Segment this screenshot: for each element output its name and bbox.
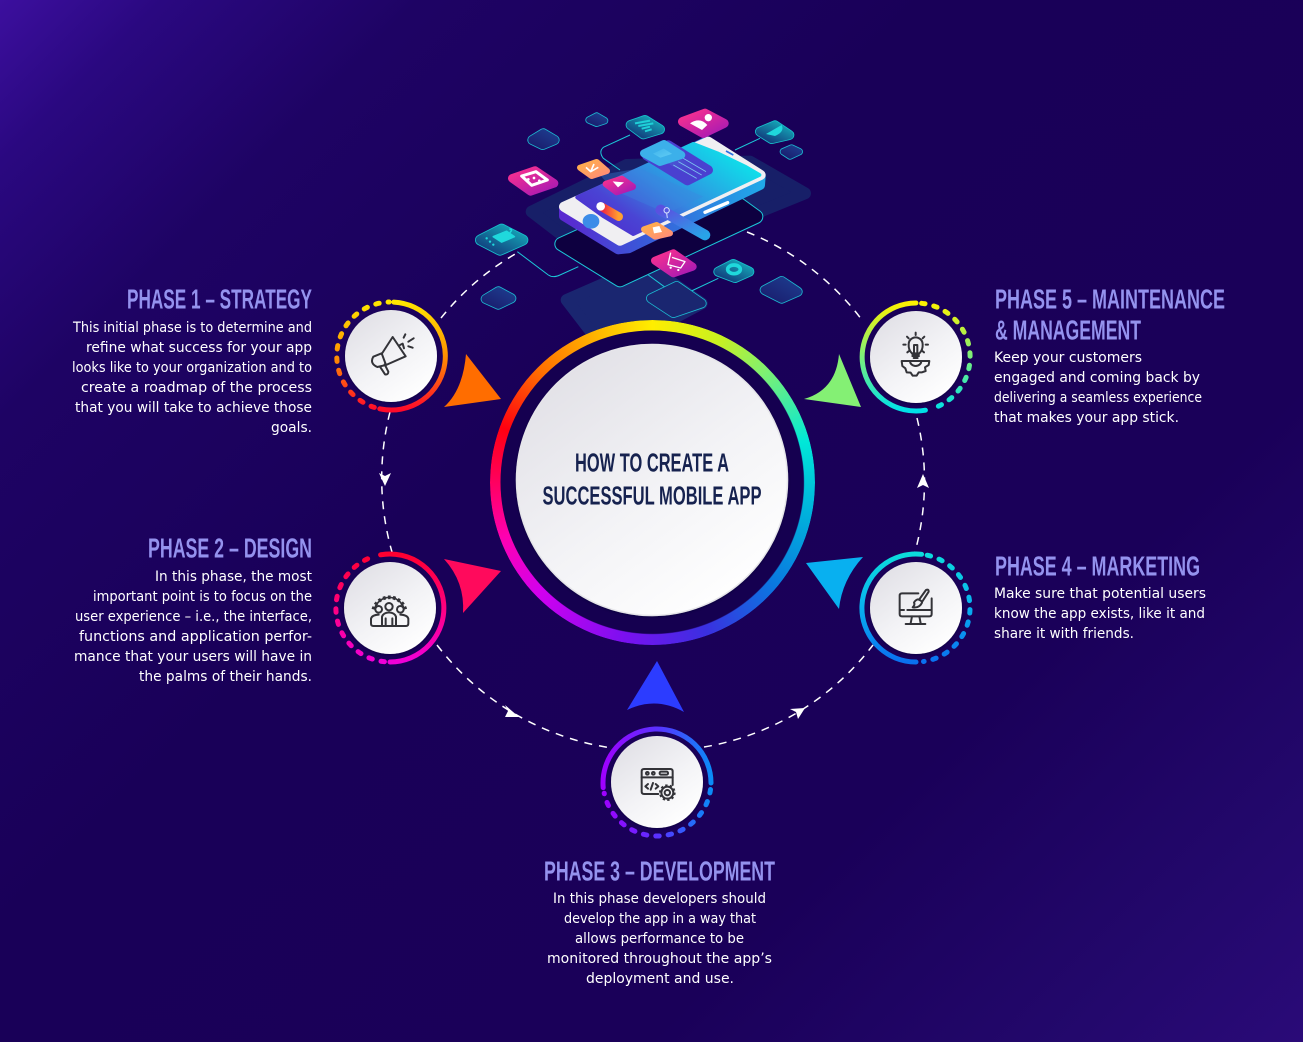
text: phase 1: This initial phase is to determine and <box>72 320 312 336</box>
text: phase 1: PHASE 1 – STRATEGY <box>127 283 312 314</box>
text: phase 5 <box>994 283 1225 426</box>
text: phase 4 <box>994 550 1206 642</box>
tile: download <box>580 162 607 176</box>
text: phase 2: In this phase, the most <box>155 569 312 585</box>
tile: lock <box>481 229 523 250</box>
text: phase 3: PHASE 3 – DEVELOPMENT <box>544 855 775 886</box>
text: phase 2: user experience – i.e., the interface, <box>75 609 312 625</box>
text: phase 1: goals. <box>271 420 312 436</box>
tile: cart <box>655 253 693 273</box>
text: phase 2: PHASE 2 – DESIGN <box>148 532 312 563</box>
text: phase 1: that you will take to achieve those <box>75 400 312 416</box>
text: phase 3: develop the app in a way that <box>564 911 756 927</box>
text: phase 5: engaged and coming back by <box>994 370 1200 386</box>
search bar <box>661 208 705 235</box>
text: phase 4: Make sure that potential users <box>994 586 1206 602</box>
arrow: phase 4 <box>806 557 863 609</box>
tile: chat <box>512 171 554 191</box>
text: phase 3: monitored throughout the app’s <box>547 951 772 967</box>
icon: bulb and gear <box>902 333 929 376</box>
arrow: phase 5 <box>804 354 861 407</box>
text: phase 1: create a roadmap of the process <box>81 380 312 396</box>
tile: list <box>631 120 660 134</box>
text: phase 5: delivering a seamless experience <box>994 390 1202 406</box>
tile: alert <box>644 225 670 237</box>
connector lines <box>517 135 760 295</box>
arrow: phase 1 <box>444 354 501 407</box>
text: phase 2: functions and application perfor- <box>79 629 312 645</box>
text: phase 1: refine what success for your app <box>86 340 312 356</box>
tile: play <box>606 179 633 192</box>
node: phase 5 <box>862 303 970 411</box>
center circle <box>500 330 804 634</box>
icon: monitor and brush <box>900 590 932 624</box>
node: phase 1 <box>337 302 445 410</box>
text: phase 4: know the app exists, like it and <box>994 606 1205 622</box>
text: phase 4: share it with friends. <box>994 626 1134 642</box>
text: phase 5: that makes your app stick. <box>994 410 1179 426</box>
center title: SUCCESSFUL MOBILE APP <box>542 480 762 510</box>
shadow plate under phone <box>562 193 756 280</box>
text: phase 3: allows performance to be <box>575 931 744 947</box>
outlined tiles <box>486 116 799 313</box>
center title: HOW TO CREATE A <box>575 448 729 478</box>
phone <box>564 142 761 249</box>
text: phase 3: deployment and use. <box>586 971 734 987</box>
node: phase 2 <box>336 554 444 662</box>
tile: gear <box>718 264 749 278</box>
back plates <box>532 162 805 343</box>
text: phase 2: important point is to focus on the <box>93 589 312 605</box>
text: phase 3 <box>544 855 775 987</box>
text: phase 2 <box>74 532 312 685</box>
text: phase 2: mance that your users will have in <box>74 649 312 665</box>
tile: location pin <box>760 125 789 139</box>
tile: user <box>683 113 724 133</box>
text: phase 1 <box>72 283 312 436</box>
text: phase 5: & MANAGEMENT <box>995 314 1141 345</box>
arrow: phase 3 <box>627 661 684 712</box>
text: phase 1: looks like to your organization and to <box>72 360 312 376</box>
text: phase 3: In this phase developers should <box>553 891 766 907</box>
node: phase 4 <box>862 554 970 662</box>
icon: team gear <box>371 597 408 626</box>
arrow: phase 2 <box>444 559 501 613</box>
dashed cycle path <box>382 232 925 748</box>
node: phase 3 <box>603 729 711 836</box>
center title <box>542 448 762 510</box>
text: phase 5: Keep your customers <box>994 350 1142 366</box>
text: phase 2: the palms of their hands. <box>139 669 312 685</box>
dashed path arrowheads <box>379 473 929 719</box>
icon: code window <box>642 769 675 800</box>
center rainbow ring <box>490 320 814 645</box>
text: phase 4: PHASE 4 – MARKETING <box>995 550 1200 581</box>
phone content card <box>644 144 708 181</box>
icon: megaphone <box>372 334 414 374</box>
